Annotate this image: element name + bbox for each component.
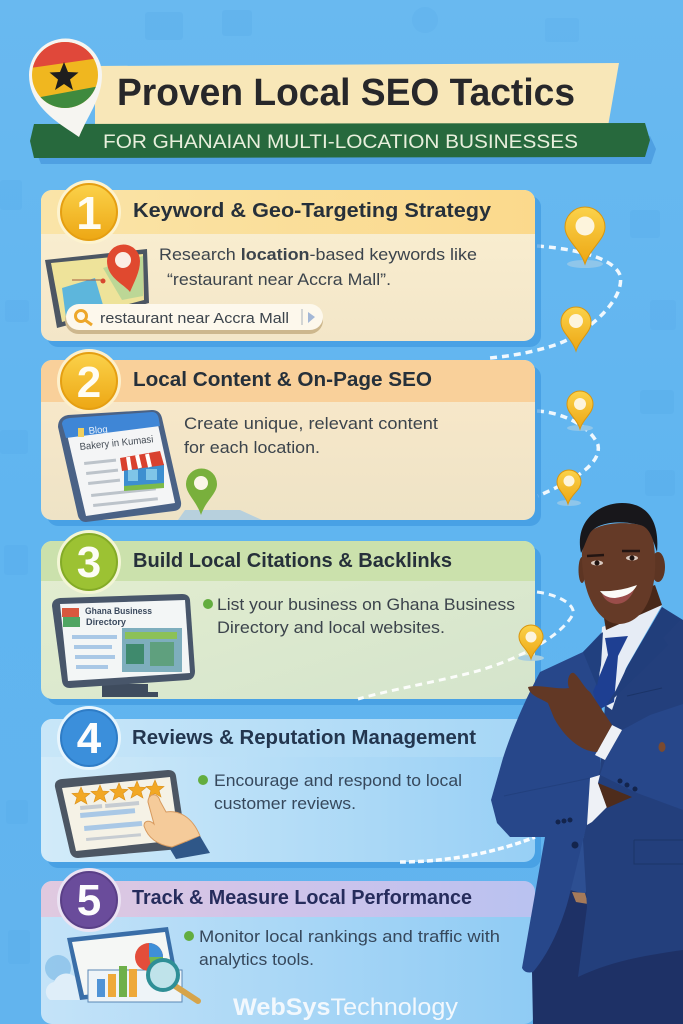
panel 1 heading: Keyword & Geo-Targeting Strategy (133, 200, 492, 222)
badge 3 (57, 530, 121, 594)
route line 2 (537, 411, 598, 496)
search bar (65, 304, 323, 334)
icon: map tablet (45, 244, 149, 328)
panel 3 body text (203, 595, 515, 637)
panel 1 body text: “restaurant near Accra Mall”. (167, 270, 391, 289)
panel 2: local content (41, 360, 541, 526)
icon: green pin (178, 468, 262, 520)
icon: blog tablet (58, 410, 181, 522)
icon: blog tablet: Blog (88, 424, 108, 437)
panel 2 body text: for each location. (184, 438, 320, 457)
panel 4 body text: customer reviews. (214, 794, 356, 813)
shirt (598, 605, 662, 710)
icon: shop (120, 451, 164, 491)
icon: pointing hand (144, 795, 210, 859)
icon: magnifier (148, 960, 198, 1001)
icon: directory monitor (52, 594, 195, 697)
panel 5 header band (41, 881, 535, 917)
subtitle ribbon (30, 123, 656, 164)
subtitle ribbon: FOR GHANAIAN MULTI-LOCATION BUSINESSES (103, 132, 578, 153)
badge 5 (57, 868, 121, 932)
search bar: restaurant near Accra Mall (100, 310, 289, 327)
rating stars (72, 780, 164, 804)
title text: Proven Local SEO Tactics (117, 72, 575, 114)
trousers (532, 880, 683, 1024)
pin: section 1 top (565, 207, 605, 268)
panel 2 heading: Local Content & On-Page SEO (133, 369, 432, 391)
hair (580, 503, 657, 553)
badge 5: 5 (77, 876, 101, 925)
pointing hand (528, 673, 612, 752)
icon: magnifier (76, 310, 92, 325)
waist: tie end and belt (570, 838, 592, 904)
icon: analytics dashboard (45, 927, 198, 1002)
route line 4 (400, 837, 535, 862)
panel 3 body text: List your business on Ghana Business (217, 595, 515, 614)
panel 4 body text: Encourage and respond to local (214, 771, 462, 790)
panel 3 body text: Directory and local websites. (217, 618, 445, 637)
icon: blog tablet: Bakery in Kumasi (79, 434, 154, 453)
badge 1 (57, 180, 121, 244)
panel 2 header band (41, 360, 535, 402)
panel 1: keyword strategy (41, 190, 541, 347)
badge 4 (57, 706, 121, 770)
panel 5 body text: Monitor local rankings and traffic with (199, 927, 500, 946)
jacket pockets (627, 688, 683, 864)
viewer-left sleeve edge (504, 778, 590, 796)
panel 5 body text: analytics tools. (199, 950, 314, 969)
title plate (95, 63, 619, 132)
panel 3 header band (41, 541, 535, 581)
eyebrows (587, 551, 640, 556)
jacket left side (491, 632, 602, 972)
panel 1 body text (159, 245, 477, 289)
panel 5 heading: Track & Measure Local Performance (132, 887, 472, 909)
pin: section 3 (518, 625, 544, 661)
head (578, 503, 665, 624)
panel 5 body text (184, 927, 500, 969)
pin: section 1 bottom (561, 307, 591, 351)
badge 1: 1 (76, 187, 102, 239)
shirt cuff upper (595, 725, 622, 760)
header: title banner (30, 63, 656, 164)
panel 4: reviews (41, 719, 541, 868)
footer brand: WebSysTechnology (233, 994, 458, 1021)
route line 1 (490, 246, 621, 358)
sleeve buttons (556, 778, 638, 848)
badge 2 (57, 349, 121, 413)
panel 4 heading: Reviews & Reputation Management (132, 727, 476, 749)
badge 4: 4 (77, 714, 102, 763)
pin: section 2 bottom (557, 470, 581, 506)
right lapel (606, 607, 680, 706)
panel 2 body text: Create unique, relevant content (184, 414, 438, 433)
left lapel (583, 632, 603, 686)
shirt cuff lower (587, 775, 607, 825)
neck (602, 585, 662, 630)
badge 3: 3 (77, 538, 101, 587)
panel 4 header band (41, 719, 535, 757)
panel 2 body text (184, 414, 438, 457)
panel 1 body text: Research location-based keywords like (159, 245, 477, 264)
panel 3: citations (41, 541, 541, 705)
icon: directory monitor: Ghana Business (85, 606, 152, 617)
tucked hand (598, 783, 632, 808)
businessman (491, 503, 683, 1024)
jacket right side (578, 607, 683, 977)
route line 3 (358, 592, 573, 699)
icon: Ghana flag pin (29, 38, 102, 137)
necktie (593, 636, 628, 710)
panel 1 header band (41, 190, 535, 234)
viewer-right sleeve (600, 704, 683, 810)
panel 5: tracking (41, 881, 535, 1024)
icon: review tablet (55, 770, 210, 859)
icon: directory monitor: Directory (86, 617, 127, 628)
little finger (658, 742, 666, 752)
pin: section 2 top (567, 391, 593, 431)
badge 2: 2 (77, 358, 101, 407)
mouth (602, 590, 634, 604)
panel 4 body text (198, 771, 462, 813)
panel 3 heading: Build Local Citations & Backlinks (133, 550, 452, 572)
eyes (591, 556, 638, 566)
